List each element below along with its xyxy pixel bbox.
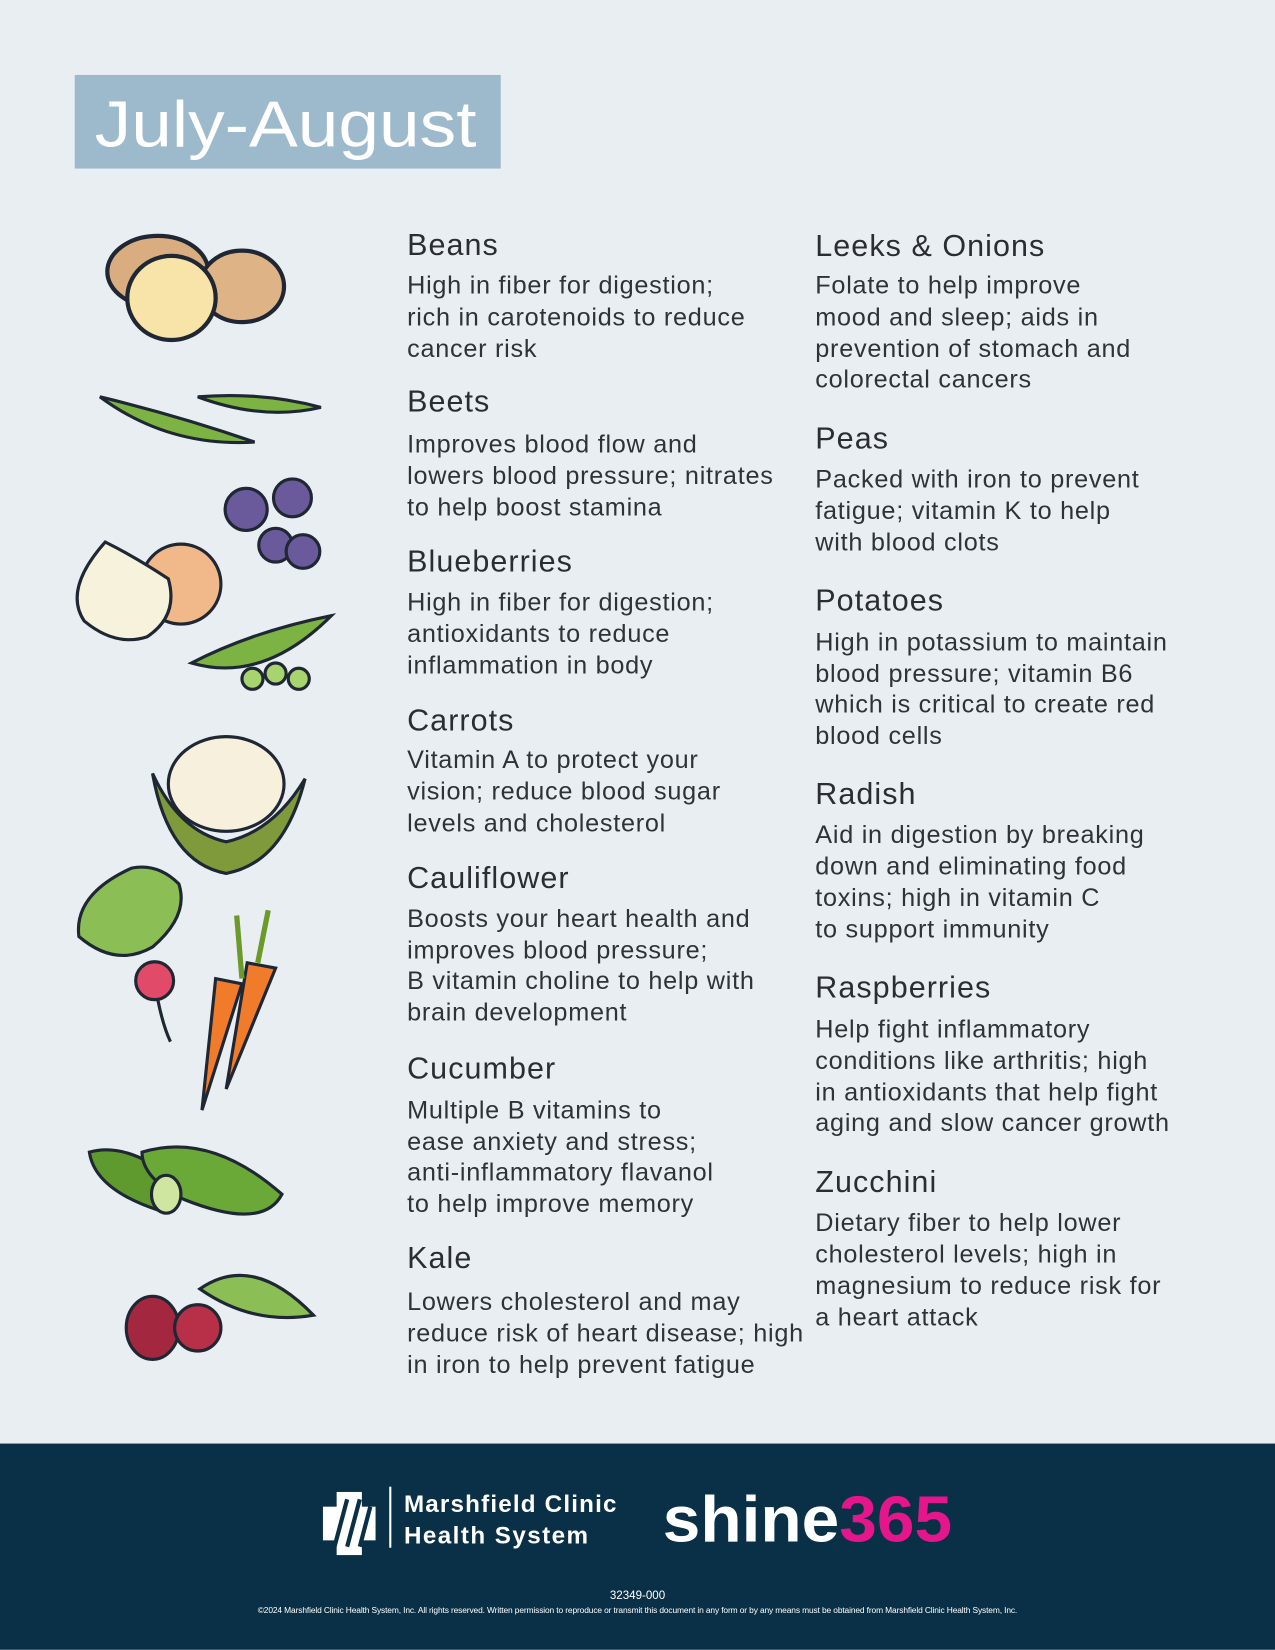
panel: left column: [407, 228, 804, 1379]
footer: ©2024 Marshfield Clinic Health System, Inc. All rights reserved. Written permission to reproduce or transmit this document in any form or by any means must be obtained from Marshfield Clinic Health System, Inc.: [258, 1605, 1017, 1615]
item: peas: Packed with iron to prevent: [815, 465, 1140, 493]
item: blueberries: High in fiber for digestion;: [407, 588, 714, 616]
item: radish: to support immunity: [815, 916, 1049, 944]
item: radish: down and eliminating food: [815, 852, 1127, 880]
item: beets: to help boost stamina: [407, 494, 663, 522]
item: leeks: Folate to help improve: [815, 272, 1081, 300]
item: blueberries: inflammation in body: [407, 652, 653, 680]
logo: shine365: shine365: [663, 1482, 952, 1555]
icon: raspberries: [126, 1275, 313, 1359]
icon: cucumbers: [89, 1147, 282, 1214]
item: cauliflower: Boosts your heart health and: [407, 905, 750, 933]
item: zucchini: magnesium to reduce risk for: [815, 1272, 1161, 1300]
item: beans: [407, 228, 745, 363]
item: beans: High in fiber for digestion;: [407, 272, 714, 300]
footer: Health System: [404, 1523, 588, 1550]
icon: blueberries: [225, 479, 320, 568]
item: radish: Aid in digestion by breaking: [815, 821, 1145, 849]
item: beets: Improves blood flow and: [407, 431, 698, 459]
item: cucumber: Multiple B vitamins to: [407, 1097, 662, 1125]
item: beets: [407, 385, 774, 522]
item: potatoes: High in potassium to maintain: [815, 628, 1168, 656]
title: July-August: [95, 87, 477, 160]
item: potatoes: which is critical to create red: [814, 690, 1155, 718]
item: leeks: mood and sleep; aids in: [815, 303, 1099, 331]
item: potatoes: Potatoes: [815, 583, 944, 617]
item: carrots: [407, 703, 721, 837]
item: cauliflower: Cauliflower: [407, 861, 570, 895]
item: beans: Beans: [407, 228, 499, 262]
logo text: marshfield clinic: Marshfield Clinic: [404, 1491, 616, 1518]
panel: right column: [814, 229, 1170, 1332]
item: blueberries: Blueberries: [407, 544, 573, 578]
item: cucumber: Cucumber: [407, 1052, 556, 1086]
item: peas: [814, 421, 1140, 556]
item: cucumber: anti-inflammatory flavanol: [407, 1159, 714, 1187]
item: zucchini: cholesterol levels; high in: [815, 1241, 1117, 1269]
item: beets: lowers blood pressure; nitrates: [407, 462, 774, 490]
item: cucumber: [407, 1052, 714, 1218]
item: radish: [815, 777, 1145, 944]
item: kale: Kale: [407, 1241, 472, 1275]
item: carrots: levels and cholesterol: [407, 809, 666, 837]
item: cucumber: ease anxiety and stress;: [407, 1128, 697, 1156]
item: potatoes: blood pressure; vitamin B6: [815, 660, 1133, 688]
item: blueberries: [407, 544, 714, 680]
icon: bean pods: [100, 396, 321, 443]
item: leeks: colorectal cancers: [815, 365, 1032, 393]
item: cauliflower: improves blood pressure;: [407, 937, 708, 965]
item: carrots: Carrots: [407, 703, 514, 737]
icon: cauliflower: [153, 737, 305, 873]
item: kale: reduce risk of heart disease; high: [407, 1320, 804, 1348]
item: radish: Radish: [815, 777, 917, 811]
item: cucumber: to help improve memory: [407, 1190, 694, 1218]
item: beans: rich in carotenoids to reduce: [407, 303, 745, 331]
item: raspberries: aging and slow cancer growth: [815, 1109, 1170, 1137]
item: blueberries: antioxidants to reduce: [407, 620, 670, 648]
item: beets: Beets: [407, 385, 490, 419]
item: radish: toxins; high in vitamin C: [815, 884, 1100, 912]
item: kale: in iron to help prevent fatigue: [407, 1351, 755, 1379]
item: leeks: [815, 229, 1131, 393]
icon: carrots: [202, 910, 276, 1110]
icon: marshfield logo: [323, 1492, 376, 1555]
item: potatoes: blood cells: [815, 722, 943, 750]
footer text: 32349-000: [610, 1590, 665, 1602]
item: carrots: vision; reduce blood sugar: [407, 778, 721, 806]
icon: radish: [78, 867, 181, 1042]
icon: potatoes: [107, 236, 284, 340]
item: raspberries: Help fight inflammatory: [815, 1016, 1090, 1044]
item: raspberries: Raspberries: [815, 971, 991, 1005]
item: raspberries: in antioxidants that help fight: [815, 1079, 1158, 1107]
item: beans: cancer risk: [407, 335, 537, 363]
icon: onions: [77, 542, 221, 640]
item: carrots: Vitamin A to protect your: [407, 746, 699, 774]
icon: peas: [191, 616, 331, 689]
item: leeks: prevention of stomach and: [815, 335, 1131, 363]
item: potatoes: [814, 583, 1168, 750]
item: cauliflower: B vitamin choline to help with: [407, 967, 755, 995]
item: zucchini: Dietary fiber to help lower: [815, 1209, 1121, 1237]
item: peas: fatigue; vitamin K to help: [815, 497, 1111, 525]
item: peas: with blood clots: [814, 528, 1000, 556]
item: raspberries: [815, 971, 1170, 1137]
footer: [0, 1444, 1275, 1650]
item: raspberries: conditions like arthritis; high: [815, 1047, 1148, 1075]
item: zucchini: Zucchini: [815, 1165, 937, 1199]
item: cauliflower: brain development: [407, 999, 627, 1027]
item: kale: Lowers cholesterol and may: [407, 1288, 740, 1316]
item: leeks: Leeks & Onions: [815, 229, 1045, 263]
item: zucchini: [815, 1165, 1161, 1332]
item: kale: [407, 1241, 804, 1379]
item: peas: Peas: [815, 421, 889, 455]
item: cauliflower: [407, 861, 755, 1027]
title: [75, 75, 501, 169]
item: zucchini: a heart attack: [815, 1304, 979, 1332]
